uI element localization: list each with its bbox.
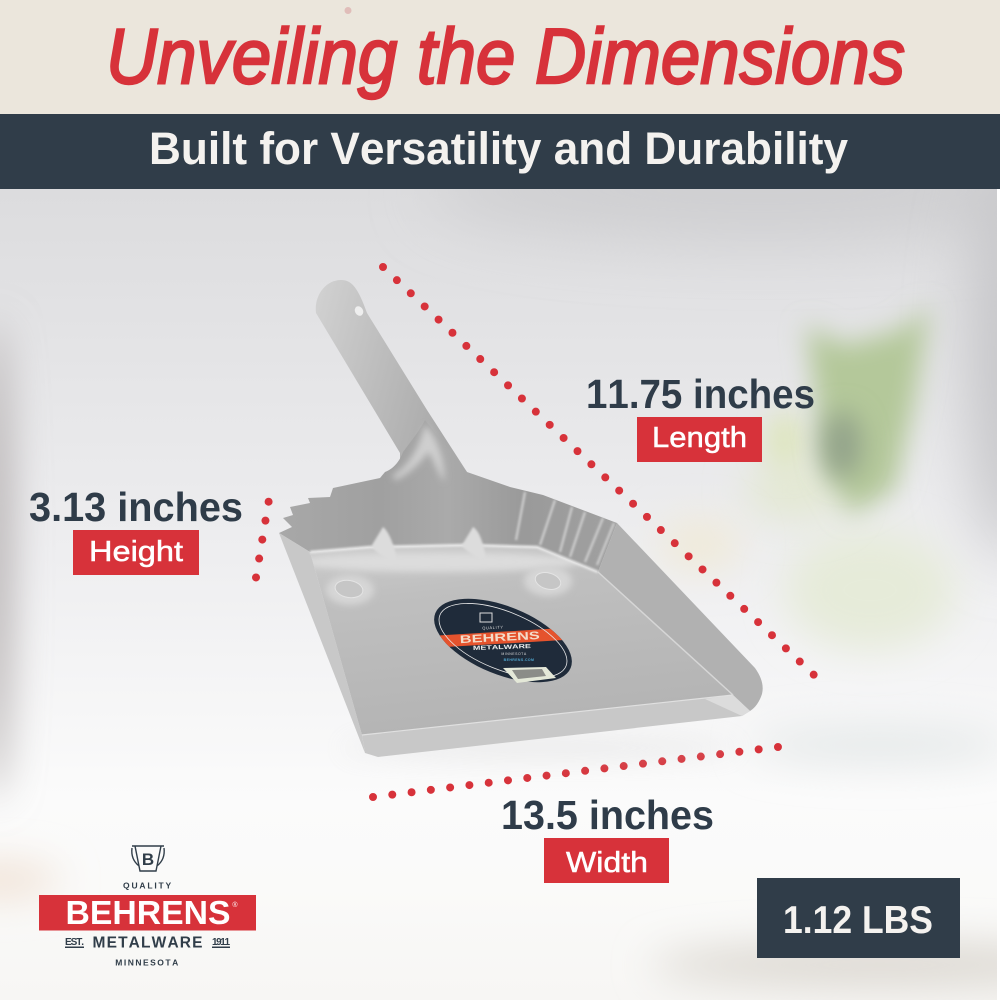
height tag: Height [89, 536, 183, 568]
height value: 3.13 inches [29, 484, 243, 530]
title: Unveiling the Dimensions [106, 12, 905, 100]
left wall [279, 533, 365, 753]
quality: QUALITY [123, 880, 173, 890]
product label: MINNESOTA [501, 652, 527, 656]
dotted line: width [373, 747, 778, 797]
product label: METALWARE [473, 644, 531, 652]
callout: length [586, 371, 815, 462]
minnesota: MINNESOTA [115, 958, 180, 968]
dotted line: length [383, 267, 814, 675]
metalware line: EST. [65, 937, 84, 948]
back wall with crimped edge [279, 420, 617, 572]
handle [316, 280, 467, 480]
brand logo [39, 846, 256, 968]
neck highlight [392, 425, 444, 482]
front lip [362, 695, 750, 757]
bumps [372, 527, 397, 561]
weight badge: 1.12 LBS [783, 899, 933, 942]
width value: 13.5 inches [501, 792, 714, 838]
icon: bucket: B [142, 850, 154, 869]
product label: QUALITY [482, 624, 504, 631]
subtitle: Built for Versatility and Durability [149, 123, 848, 174]
metalware line [65, 934, 230, 952]
width tag [544, 838, 669, 883]
icon: bucket [132, 846, 164, 871]
callout: height [29, 484, 243, 575]
header band: title [0, 0, 1000, 114]
dustpan product [279, 280, 763, 758]
metalware line: METALWARE [92, 934, 202, 952]
width tag: Width [566, 847, 648, 879]
product label [434, 598, 572, 683]
floor [310, 545, 733, 735]
subtitle band [0, 114, 1000, 189]
weight badge [757, 878, 960, 958]
floor sheen [300, 552, 580, 605]
metalware line: 1911 [212, 937, 230, 948]
right wall [598, 523, 763, 711]
brand bar: BEHRENS [66, 894, 231, 931]
brand bar: ® [232, 901, 238, 909]
dimples [334, 578, 364, 600]
length tag: Length [652, 422, 747, 454]
product label: BEHRENS [460, 630, 540, 646]
length tag [637, 417, 762, 462]
height tag [73, 530, 199, 575]
callout: width [501, 792, 714, 883]
length value: 11.75 inches [586, 371, 815, 417]
ribs [516, 492, 614, 565]
product label: BEHRENS.COM [504, 658, 534, 662]
dotted line: height [256, 502, 269, 578]
